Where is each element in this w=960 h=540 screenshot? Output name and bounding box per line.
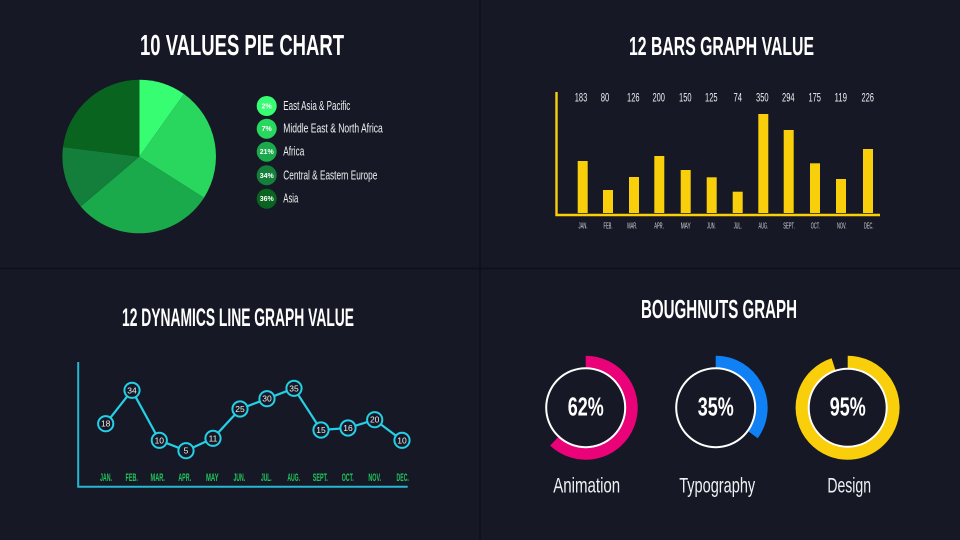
- legend item: Central & Eastern Europe: [257, 165, 377, 185]
- legend item: East Asia & Pacific: East Asia & Pacific: [283, 99, 350, 113]
- legend item: Central & Eastern Europe: Central & Eastern Europe: [283, 168, 377, 182]
- data points: 35: [289, 383, 299, 393]
- data points: 11: [209, 433, 218, 443]
- data points: 25: [235, 404, 245, 414]
- data points: 5: [184, 446, 189, 456]
- bar values: 226: [861, 90, 874, 104]
- legend item: Middle East & North Africa: [257, 119, 383, 139]
- bar chart: [556, 90, 880, 230]
- line month labels: OCT.: [342, 472, 354, 484]
- bar month labels: [578, 222, 873, 230]
- pie chart: [62, 80, 216, 233]
- panel: doughnut graphs: [546, 294, 893, 498]
- bar values: 119: [834, 90, 847, 104]
- line chart: [78, 362, 410, 487]
- bar values: 126: [627, 90, 640, 104]
- line month labels: JUN.: [233, 472, 245, 484]
- donut: animation 62%: 62%: [568, 392, 604, 422]
- bar month labels: JAN.: [578, 222, 588, 230]
- line month labels: JUL.: [261, 472, 272, 484]
- legend item: East Asia & Pacific: [257, 96, 350, 116]
- bar month labels: JUN.: [707, 222, 716, 230]
- bar values: 183: [575, 90, 587, 104]
- data line: [106, 388, 402, 451]
- title: boughnuts graph: BOUGHNUTS GRAPH: [641, 294, 797, 324]
- data points: 30: [262, 394, 272, 404]
- data points: 16: [343, 423, 353, 433]
- line month labels: [100, 472, 409, 484]
- data points: 15: [316, 425, 326, 435]
- line month labels: NOV.: [368, 472, 381, 484]
- legend item: Africa: Africa: [283, 145, 304, 159]
- panel: line graph: [78, 304, 410, 487]
- donut: typography 35%: 35%: [698, 392, 734, 422]
- legend item: Middle East & North Africa: 7%: [262, 126, 273, 133]
- data points: 20: [370, 415, 380, 425]
- line month labels: MAY: [206, 472, 219, 484]
- legend item: East Asia & Pacific: 2%: [262, 104, 273, 110]
- donut: design 95%: [802, 362, 893, 498]
- donut: design 95%: 95%: [830, 392, 866, 422]
- bar month labels: FEB.: [604, 222, 612, 230]
- panel: bar graph: [556, 31, 880, 230]
- donut: animation 62%: Animation: [553, 475, 620, 498]
- data points: 34: [127, 385, 137, 395]
- legend item: Africa: 21%: [260, 149, 274, 156]
- bar values: 200: [652, 90, 665, 104]
- bar values: 80: [601, 90, 609, 104]
- legend item: Asia: 36%: [260, 196, 274, 203]
- bars: [578, 114, 873, 213]
- data points: 10: [397, 435, 407, 445]
- bar month labels: MAR.: [627, 222, 637, 230]
- bar month labels: JUL.: [734, 222, 742, 230]
- bar month labels: MAY: [681, 222, 691, 230]
- bar values: 294: [782, 90, 795, 104]
- title: 12 bars graph value: 12 BARS GRAPH VALUE: [629, 31, 814, 61]
- bar values: 125: [705, 90, 718, 104]
- title: 12 dynamics line graph value: 12 DYNAMICS LINE GRAPH VALUE: [122, 304, 354, 332]
- data points: 18: [101, 419, 111, 429]
- title: 10 values pie chart: 10 VALUES PIE CHART: [140, 30, 344, 62]
- donut: typography 35%: [676, 362, 762, 498]
- panel: pie chart: [62, 30, 383, 233]
- legend item: Africa: [257, 142, 304, 162]
- bar chart: DEC.: [864, 222, 873, 230]
- bar values: [575, 90, 874, 104]
- line month labels: MAR.: [151, 472, 165, 484]
- legend: [257, 96, 383, 209]
- legend item: Asia: Asia: [283, 192, 298, 206]
- bar month labels: SEPT.: [783, 222, 795, 230]
- bar month labels: APR.: [654, 222, 664, 230]
- donut: design 95%: Design: [827, 475, 871, 498]
- line chart axes: [78, 362, 408, 487]
- legend item: Central & Eastern Europe: 34%: [260, 173, 274, 180]
- data points: 10: [155, 435, 164, 445]
- bar values: 150: [679, 90, 692, 104]
- legend item: Middle East & North Africa: Middle East & North Africa: [283, 122, 383, 136]
- bar month labels: NOV.: [837, 222, 846, 230]
- bar month labels: AUG.: [759, 222, 768, 230]
- donut: typography 35%: Typography: [679, 475, 756, 498]
- bar values: 74: [733, 90, 742, 104]
- bar values: 350: [756, 90, 769, 104]
- line month labels: JAN.: [100, 472, 112, 484]
- line month labels: SEPT.: [313, 472, 328, 484]
- legend item: Asia: [257, 189, 298, 209]
- data points: [98, 381, 410, 458]
- line month labels: FEB.: [126, 472, 138, 484]
- line month labels: AUG.: [287, 472, 300, 484]
- bar month labels: OCT.: [811, 222, 820, 230]
- infographic canvas: DEC.: [397, 472, 409, 484]
- bar chart axes: [556, 92, 880, 215]
- bar values: 175: [808, 90, 821, 104]
- donut: animation 62%: [546, 362, 632, 498]
- line month labels: APR.: [178, 472, 191, 484]
